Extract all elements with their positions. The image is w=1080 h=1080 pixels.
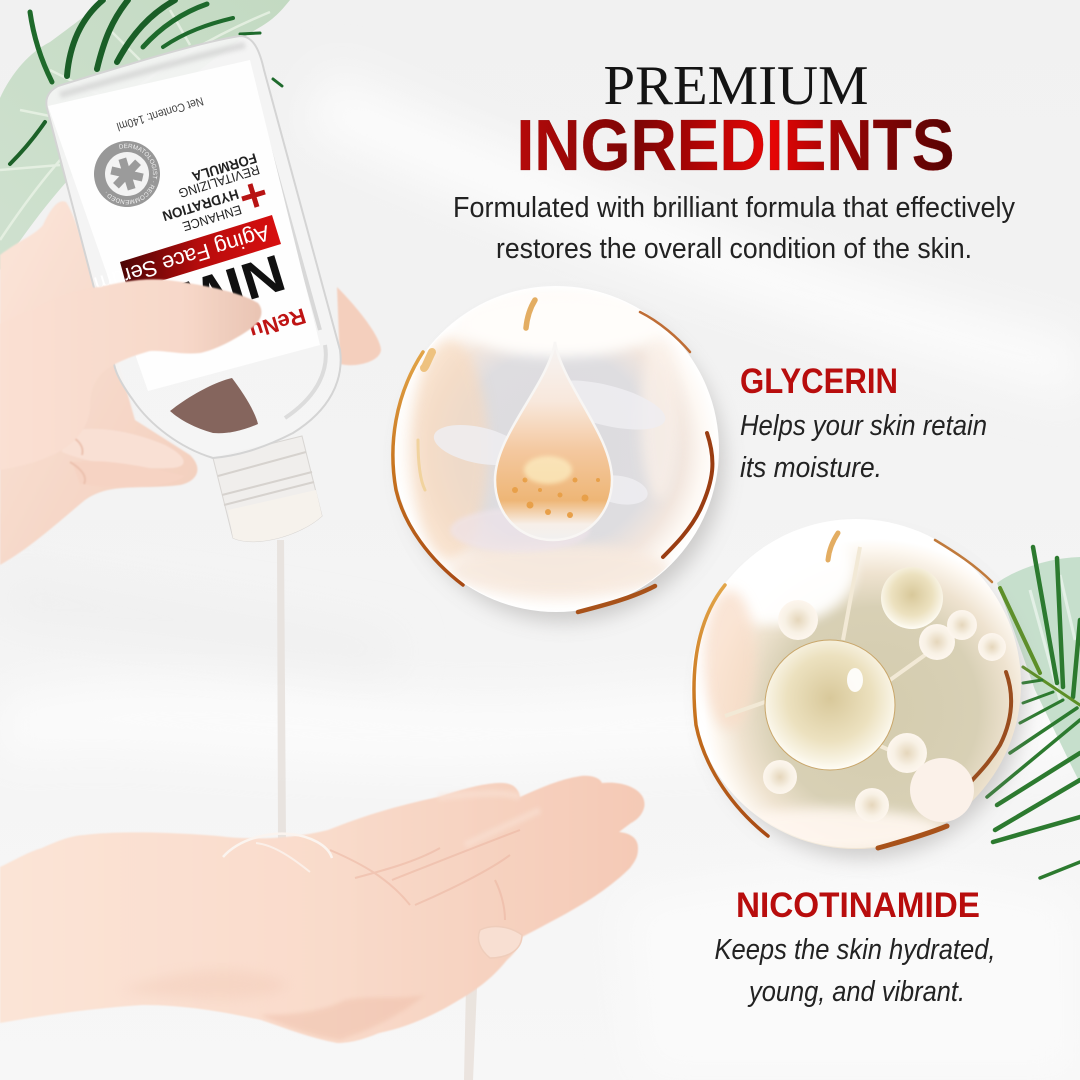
droplet icon (430, 342, 670, 552)
glycerin callout: GLYCERIN (740, 361, 898, 401)
bottle cap (213, 436, 322, 542)
leaves: top left (0, 0, 290, 270)
label claims: FORMULA (190, 150, 259, 185)
dermatologist seal: DERMATOLOGIST · RECOMMENDED · (106, 144, 158, 204)
nicotinamide callout: NICOTINAMIDE (736, 885, 980, 925)
holding hand: palm and back fingers (0, 201, 381, 565)
nicotinamide callout (714, 885, 996, 1008)
glycerin callout (740, 361, 987, 484)
serum bottle (46, 35, 342, 542)
holding hand: thumb (0, 279, 261, 470)
intro text: Formulated with brilliant formula that effectively (453, 192, 1016, 224)
glycerin callout: Helps your skin retain (740, 410, 987, 442)
label claims (161, 150, 262, 234)
intro text (453, 192, 1016, 265)
nicotinamide orb (691, 515, 1024, 858)
brand mark: ReNu (247, 303, 309, 344)
label claims: HYDRATION (161, 186, 241, 225)
product residue (170, 378, 258, 433)
bottle label (48, 60, 320, 391)
glycerin orb (393, 286, 724, 622)
ingredients heading: INGREDIENTS (516, 105, 954, 186)
nicotinamide callout: Keeps the skin hydrated, (714, 934, 996, 966)
label claims: REVITALIZING (177, 162, 262, 201)
intro text: restores the overall condition of the skin. (496, 233, 972, 265)
bottle body (46, 36, 341, 458)
premium heading: PREMIUM (604, 55, 868, 117)
leaves: bottom right (987, 547, 1080, 878)
net content: Net Content: 140ml (115, 94, 205, 134)
red band: Aging Face Serum (91, 220, 273, 297)
label claims: ENHANCE (180, 202, 244, 234)
brand name: NIWI (150, 243, 291, 336)
plus icon (242, 184, 265, 207)
serum stream (277, 540, 478, 1080)
open palm (0, 776, 644, 1043)
glycerin callout: its moisture. (740, 452, 882, 484)
nicotinamide callout: young, and vibrant. (747, 976, 965, 1008)
molecule icon (725, 547, 1006, 822)
title (516, 55, 954, 186)
